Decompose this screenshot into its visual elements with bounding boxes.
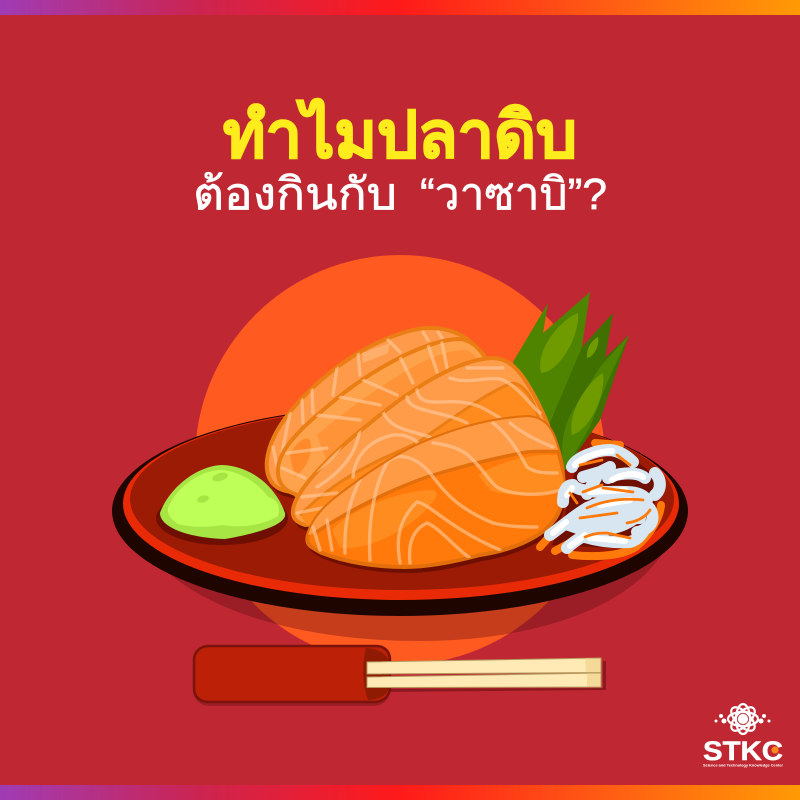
- salmon slice 1: [267, 328, 476, 492]
- title: [193, 98, 607, 219]
- daikon and carrot garnish: [540, 443, 661, 556]
- chopstick wrapper shadow: [193, 650, 390, 706]
- daikon fill: [565, 496, 648, 537]
- wasabi: [156, 465, 288, 545]
- carrot base strands: [540, 443, 661, 556]
- orange circle: [195, 255, 605, 665]
- leaf highlight 3: [571, 373, 603, 435]
- logo atom icon: [727, 703, 759, 735]
- salmon slices: [267, 328, 565, 567]
- chopstick wrapper: [194, 646, 390, 702]
- plate inner: [130, 408, 674, 590]
- subheading: white: “วาซาบิ”?: [420, 170, 607, 219]
- logo wordmark: STKC: [703, 736, 783, 766]
- wrapper opening: [363, 648, 389, 700]
- wasabi shadow: [156, 491, 288, 545]
- salmon slice 4: [307, 417, 565, 567]
- heading: yellow: ทำไมปลาดิบ: [223, 98, 577, 171]
- top gradient bar: [0, 0, 800, 15]
- subheading: white: ต้องกินกับ: [193, 170, 397, 219]
- chopsticks: [193, 646, 606, 706]
- logo orange dot: [772, 746, 778, 754]
- chopstick tips: [585, 658, 600, 686]
- logo tagline: Science and Technology Knowledge Center: [703, 762, 783, 768]
- garnish shadow: [552, 457, 656, 548]
- plate shadow: [145, 548, 666, 641]
- daikon highlights: [553, 451, 643, 546]
- shiso leaves: [513, 292, 629, 473]
- plate rim red: [123, 407, 679, 600]
- leaf shade: [549, 313, 629, 473]
- logo dots: [714, 714, 770, 724]
- front leaf: [562, 335, 629, 473]
- upper chopstick: [367, 658, 601, 674]
- plate: [112, 406, 688, 616]
- bottom gradient bar: [0, 785, 800, 800]
- salmon shadow: [269, 466, 565, 573]
- stick shadow: [380, 661, 606, 692]
- wasabi highlight: [168, 470, 279, 527]
- subheading: white: [193, 170, 607, 219]
- wasabi spots: [211, 471, 229, 483]
- logo: [703, 703, 783, 768]
- lower chopstick: [367, 673, 601, 688]
- wasabi mound: [160, 465, 285, 539]
- leaf highlight 2: [587, 337, 598, 358]
- carrot accents: [570, 455, 650, 538]
- daikon strands: [550, 450, 660, 548]
- plate rim dark: [112, 406, 688, 616]
- leaf highlight 1: [540, 313, 578, 373]
- salmon slice 3: [293, 358, 548, 530]
- back leaf left: [513, 292, 590, 430]
- salmon slice 2: [278, 339, 485, 500]
